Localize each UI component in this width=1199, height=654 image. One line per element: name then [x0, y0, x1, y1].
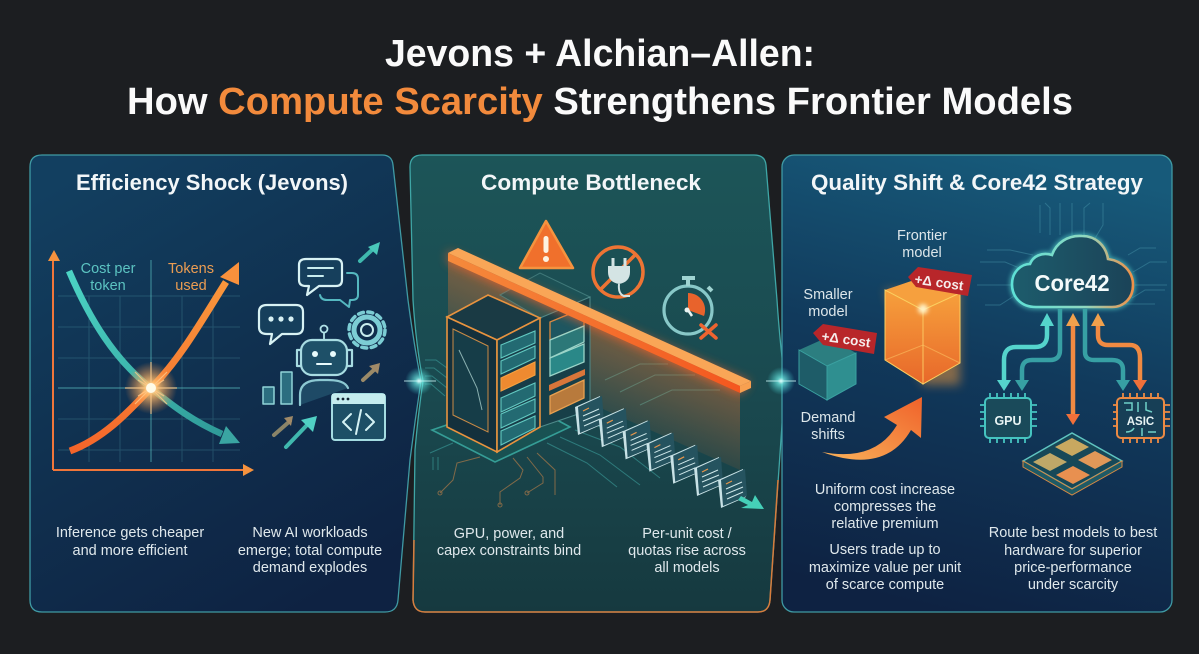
glow connector: panel 2 to 3: [766, 367, 796, 395]
icon: GPU chip: GPU: [994, 414, 1022, 428]
icon: server rack: [447, 295, 540, 452]
text: route best models: price-performance: [1014, 560, 1132, 576]
label: tokens used: Tokens: [168, 261, 214, 277]
text: route best models: under scarcity: [1028, 577, 1119, 593]
text: per-unit cost: Per-unit cost /: [642, 526, 732, 542]
icon: warning triangle: [520, 221, 573, 268]
text: new AI workloads: New AI workloads: [252, 525, 368, 541]
label: demand shifts: Demand: [801, 410, 855, 426]
glow connector: panel 1 to 2: [404, 367, 436, 395]
text: users trade up: maximize value per unit: [809, 560, 961, 576]
text: uniform cost increase: Uniform cost increase: [815, 482, 955, 498]
text: new AI workloads: emerge; total compute: [238, 543, 382, 559]
panel: quality shift and Core42: [782, 155, 1172, 612]
label: demand shifts: shifts: [811, 427, 845, 443]
panel: compute bottleneck: [410, 155, 785, 612]
constraint zone shading: [448, 261, 740, 470]
tag: smaller cost: [813, 324, 877, 354]
heading: quality shift: Quality Shift & Core42 Strategy: [811, 170, 1143, 195]
tag: smaller cost: +Δ cost: [821, 329, 872, 350]
queue of request cards: [575, 396, 747, 508]
text: route best models: Route best models to best: [989, 525, 1157, 541]
label: tokens used: used: [175, 278, 207, 294]
chart: cost per token vs tokens used: [48, 250, 254, 476]
icon: wafer chip: [1023, 433, 1122, 495]
panel: efficiency shock: [30, 155, 421, 612]
label: frontier model: model: [902, 245, 942, 261]
title: How Compute Scarcity Strengthens Frontier Models: [127, 81, 1073, 123]
icon: no power plug: [593, 247, 643, 297]
label: smaller model: model: [808, 304, 848, 320]
text: per-unit cost: quotas rise across: [628, 543, 746, 559]
icon: Core42 cloud: [1012, 236, 1133, 307]
text: per-unit cost: all models: [654, 560, 720, 576]
icon: GPU chip: [980, 393, 1037, 443]
icon: Core42 cloud: Core42: [1034, 270, 1110, 296]
rack: GPU cards: [500, 273, 590, 427]
tag: frontier cost: +Δ cost: [914, 272, 965, 293]
server base pad: [432, 400, 570, 462]
text: inference cheaper: Inference gets cheaper: [56, 525, 204, 541]
text: new AI workloads: demand explodes: [253, 560, 367, 576]
text: constraints bind: GPU, power, and: [454, 526, 564, 542]
label: cost per token: Cost per: [81, 261, 135, 277]
tag: frontier cost: [908, 267, 972, 296]
icon: stopwatch with cross: [664, 278, 716, 338]
text: uniform cost increase: compresses the: [834, 499, 936, 515]
arrow: queue direction: [738, 495, 764, 509]
circuit traces: [425, 360, 720, 507]
small model cube: [799, 337, 856, 400]
text: route best models: hardware for superior: [1004, 543, 1142, 559]
icon: ASIC chip: [1113, 393, 1170, 443]
icon: ASIC chip: ASIC: [1127, 416, 1154, 428]
Core42 network: [977, 203, 1170, 495]
bottleneck bar: [448, 248, 751, 394]
circuit lines: [977, 203, 1167, 305]
text: users trade up: Users trade up to: [829, 542, 941, 558]
arrow: demand shift: [822, 397, 922, 460]
heading: compute bottleneck: Compute Bottleneck: [481, 170, 701, 195]
label: cost per token: token: [90, 278, 126, 294]
label: frontier model: Frontier: [897, 228, 947, 244]
frontier model block: [885, 277, 960, 385]
title: [127, 33, 1073, 123]
routing arrows: [1004, 309, 1140, 416]
heading: efficiency shock: Efficiency Shock (Jevons): [76, 170, 348, 195]
text: users trade up: of scarce compute: [826, 577, 944, 593]
icons: AI workloads: [259, 242, 385, 447]
text: constraints bind: capex constraints bind: [437, 543, 581, 559]
label: smaller model: Smaller: [803, 287, 853, 303]
text: inference cheaper: and more efficient: [72, 543, 188, 559]
text: uniform cost increase: relative premium: [831, 516, 939, 532]
title: Jevons + Alchian–Allen:: [385, 33, 815, 75]
